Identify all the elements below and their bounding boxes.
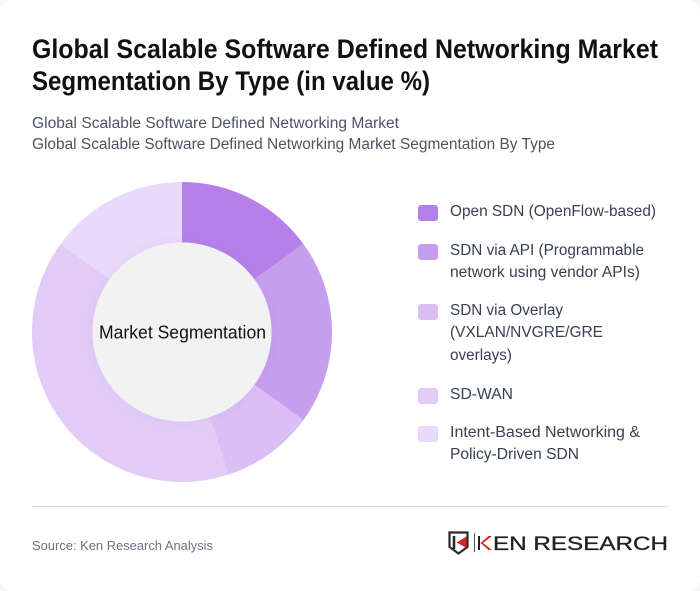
- legend item: Intent-Based Networking: Policy-Driven SDN: [450, 446, 579, 463]
- title: [32, 34, 658, 96]
- subtitle: Global Scalable Software Defined Networking Market: [32, 115, 400, 132]
- source note: Source: Ken Research Analysis: [32, 538, 213, 553]
- legend item: SDN via Overlay: SDN via Overlay: [450, 302, 563, 319]
- legend item: SD-WAN: [418, 386, 513, 404]
- legend item: SDN via API: SDN via API (Programmable: [450, 242, 644, 259]
- segment: SDN via API: [254, 244, 332, 420]
- title: Global Scalable Software Defined Networking Market: [32, 34, 658, 64]
- icon: shield: [450, 532, 468, 554]
- legend item: Intent-Based Networking: [418, 424, 641, 463]
- segment: SDN via Overlay: [210, 385, 303, 475]
- center circle: [92, 242, 272, 422]
- legend item: SDN via API: network using vendor APIs): [450, 264, 640, 281]
- donut chart: [32, 182, 332, 482]
- center label: Market Segmentation: [99, 322, 266, 342]
- legend: [418, 203, 656, 463]
- logo wordmark: EN RESEARCH: [493, 534, 668, 555]
- legend item: Intent-Based Networking: Intent-Based Networking &: [450, 424, 641, 441]
- segment: SD-WAN: [32, 244, 228, 482]
- logo: [450, 532, 668, 555]
- legend item: SDN via API: [418, 242, 644, 281]
- subtitle: Global Scalable Software Defined Networking Market Segmentation By Type: [32, 136, 555, 153]
- legend item: Open SDN: Open SDN (OpenFlow-based): [450, 203, 656, 220]
- segment: Open SDN: [182, 182, 303, 279]
- legend item: SDN via Overlay: overlays): [450, 347, 512, 364]
- segment: Intent-Based Networking: [61, 182, 182, 279]
- subtitle: [32, 115, 555, 153]
- legend item: SDN via Overlay: (VXLAN/NVGRE/GRE: [450, 324, 603, 341]
- legend item: SD-WAN: SD-WAN: [450, 386, 513, 403]
- title: Segmentation By Type (in value %): [32, 66, 430, 96]
- legend item: SDN via Overlay: [418, 302, 603, 364]
